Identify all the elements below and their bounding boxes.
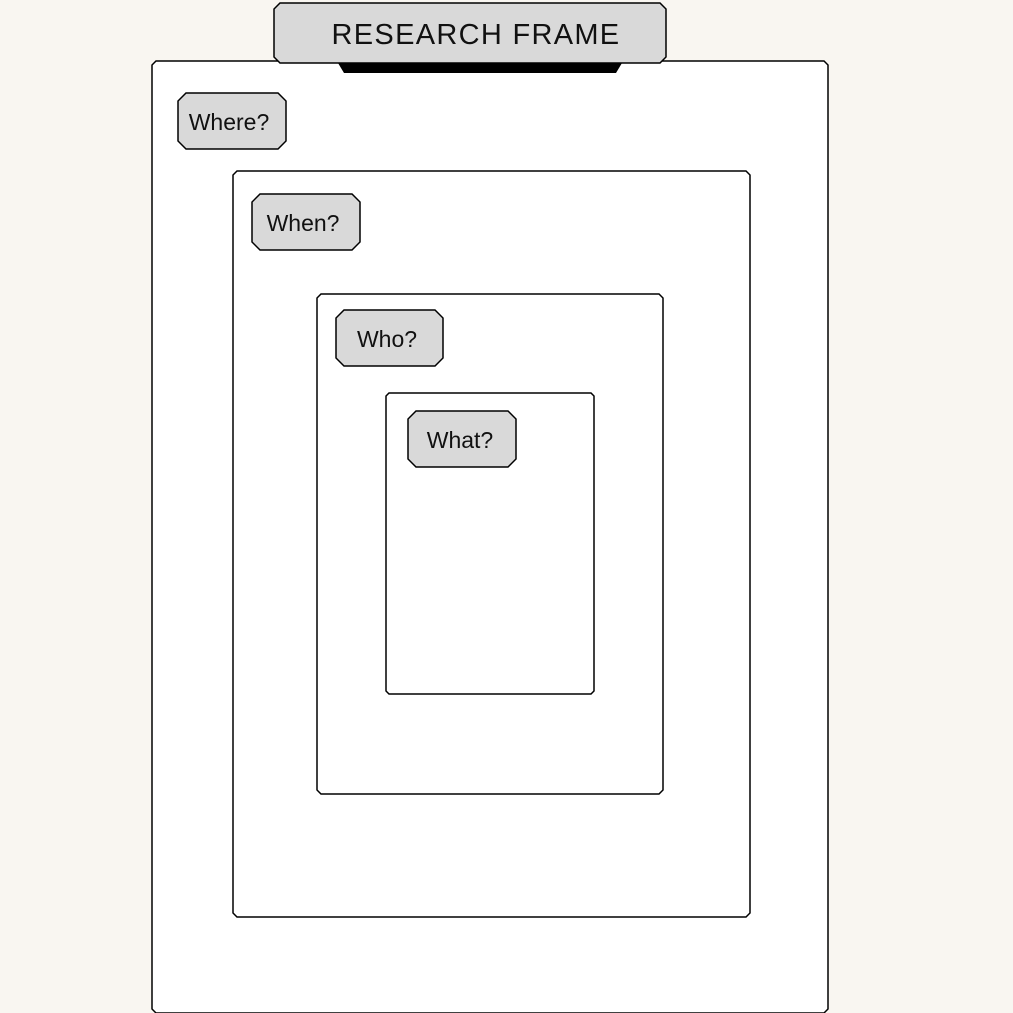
panel: What frame — [386, 393, 594, 694]
tag: Who?: Who? — [357, 326, 417, 352]
tag: Who? — [336, 310, 443, 366]
panel: When frame — [233, 171, 750, 917]
panel: Who frame — [317, 294, 663, 794]
title: RESEARCH FRAME — [332, 19, 620, 51]
tag: Where? — [178, 93, 286, 149]
title — [274, 3, 666, 63]
tag: What? — [408, 411, 516, 467]
panel: outer frame (Where) — [152, 61, 828, 1013]
tag: When?: When? — [267, 210, 339, 236]
title bar shadow — [338, 63, 622, 73]
tag: What?: What? — [427, 427, 493, 453]
tag: Where?: Where? — [189, 109, 269, 135]
tag: When? — [252, 194, 360, 250]
